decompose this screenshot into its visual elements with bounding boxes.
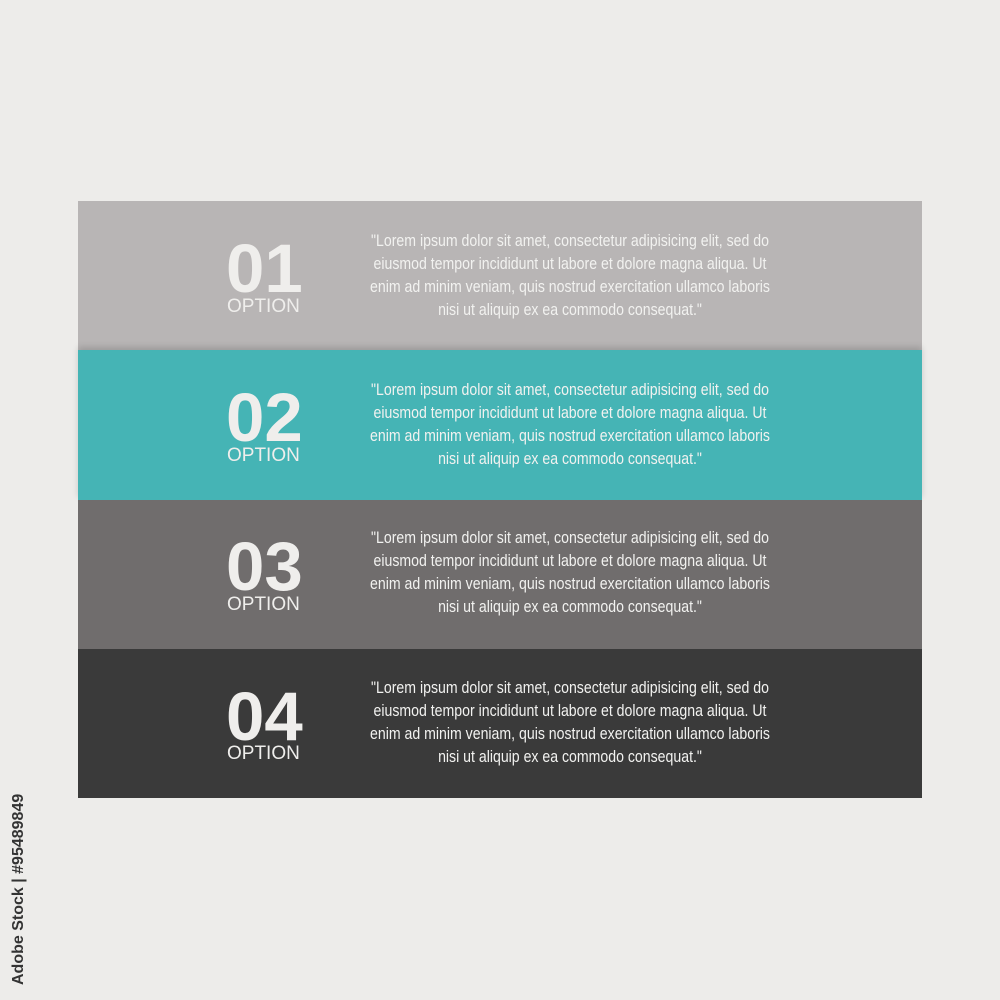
number 01: 01 [226,230,303,307]
text block [370,380,770,468]
text block: enim ad minim veniam, quis nostrud exercitation ullamco laboris [370,426,770,445]
text block: nisi ut aliquip ex ea commodo consequat." [438,747,702,766]
watermark id text: Adobe Stock | #95489849 [10,794,27,985]
text block: nisi ut aliquip ex ea commodo consequat." [438,449,702,468]
label option: OPTION [227,743,300,764]
text block: eiusmod tempor incididunt ut labore et dolore magna aliqua. Ut [374,701,766,720]
text block: nisi ut aliquip ex ea commodo consequat." [438,597,702,616]
label option: OPTION [227,445,300,466]
panel: option 01 [78,201,922,351]
panel: option 02 [78,350,922,500]
text block: "Lorem ipsum dolor sit amet, consectetur adipisicing elit, sed do [371,678,769,697]
text block: "Lorem ipsum dolor sit amet, consectetur adipisicing elit, sed do [371,231,769,250]
text block: "Lorem ipsum dolor sit amet, consectetur adipisicing elit, sed do [371,528,769,547]
number 02: 02 [226,379,303,456]
text block: eiusmod tempor incididunt ut labore et dolore magna aliqua. Ut [374,551,766,570]
label option: OPTION [227,594,300,615]
text block: nisi ut aliquip ex ea commodo consequat." [438,300,702,319]
label option: OPTION [227,296,300,317]
panel: option 03 [78,500,922,649]
text block: "Lorem ipsum dolor sit amet, consectetur adipisicing elit, sed do [371,380,769,399]
text block [370,528,770,616]
text block: enim ad minim veniam, quis nostrud exercitation ullamco laboris [370,277,770,296]
text block: eiusmod tempor incididunt ut labore et dolore magna aliqua. Ut [374,254,766,273]
text block [370,678,770,766]
text block: enim ad minim veniam, quis nostrud exercitation ullamco laboris [370,574,770,593]
panel: option 04 [78,649,922,798]
number 03: 03 [226,528,303,605]
text block [370,231,770,319]
text block: eiusmod tempor incididunt ut labore et dolore magna aliqua. Ut [374,403,766,422]
number 04: 04 [226,678,303,755]
text block: enim ad minim veniam, quis nostrud exercitation ullamco laboris [370,724,770,743]
